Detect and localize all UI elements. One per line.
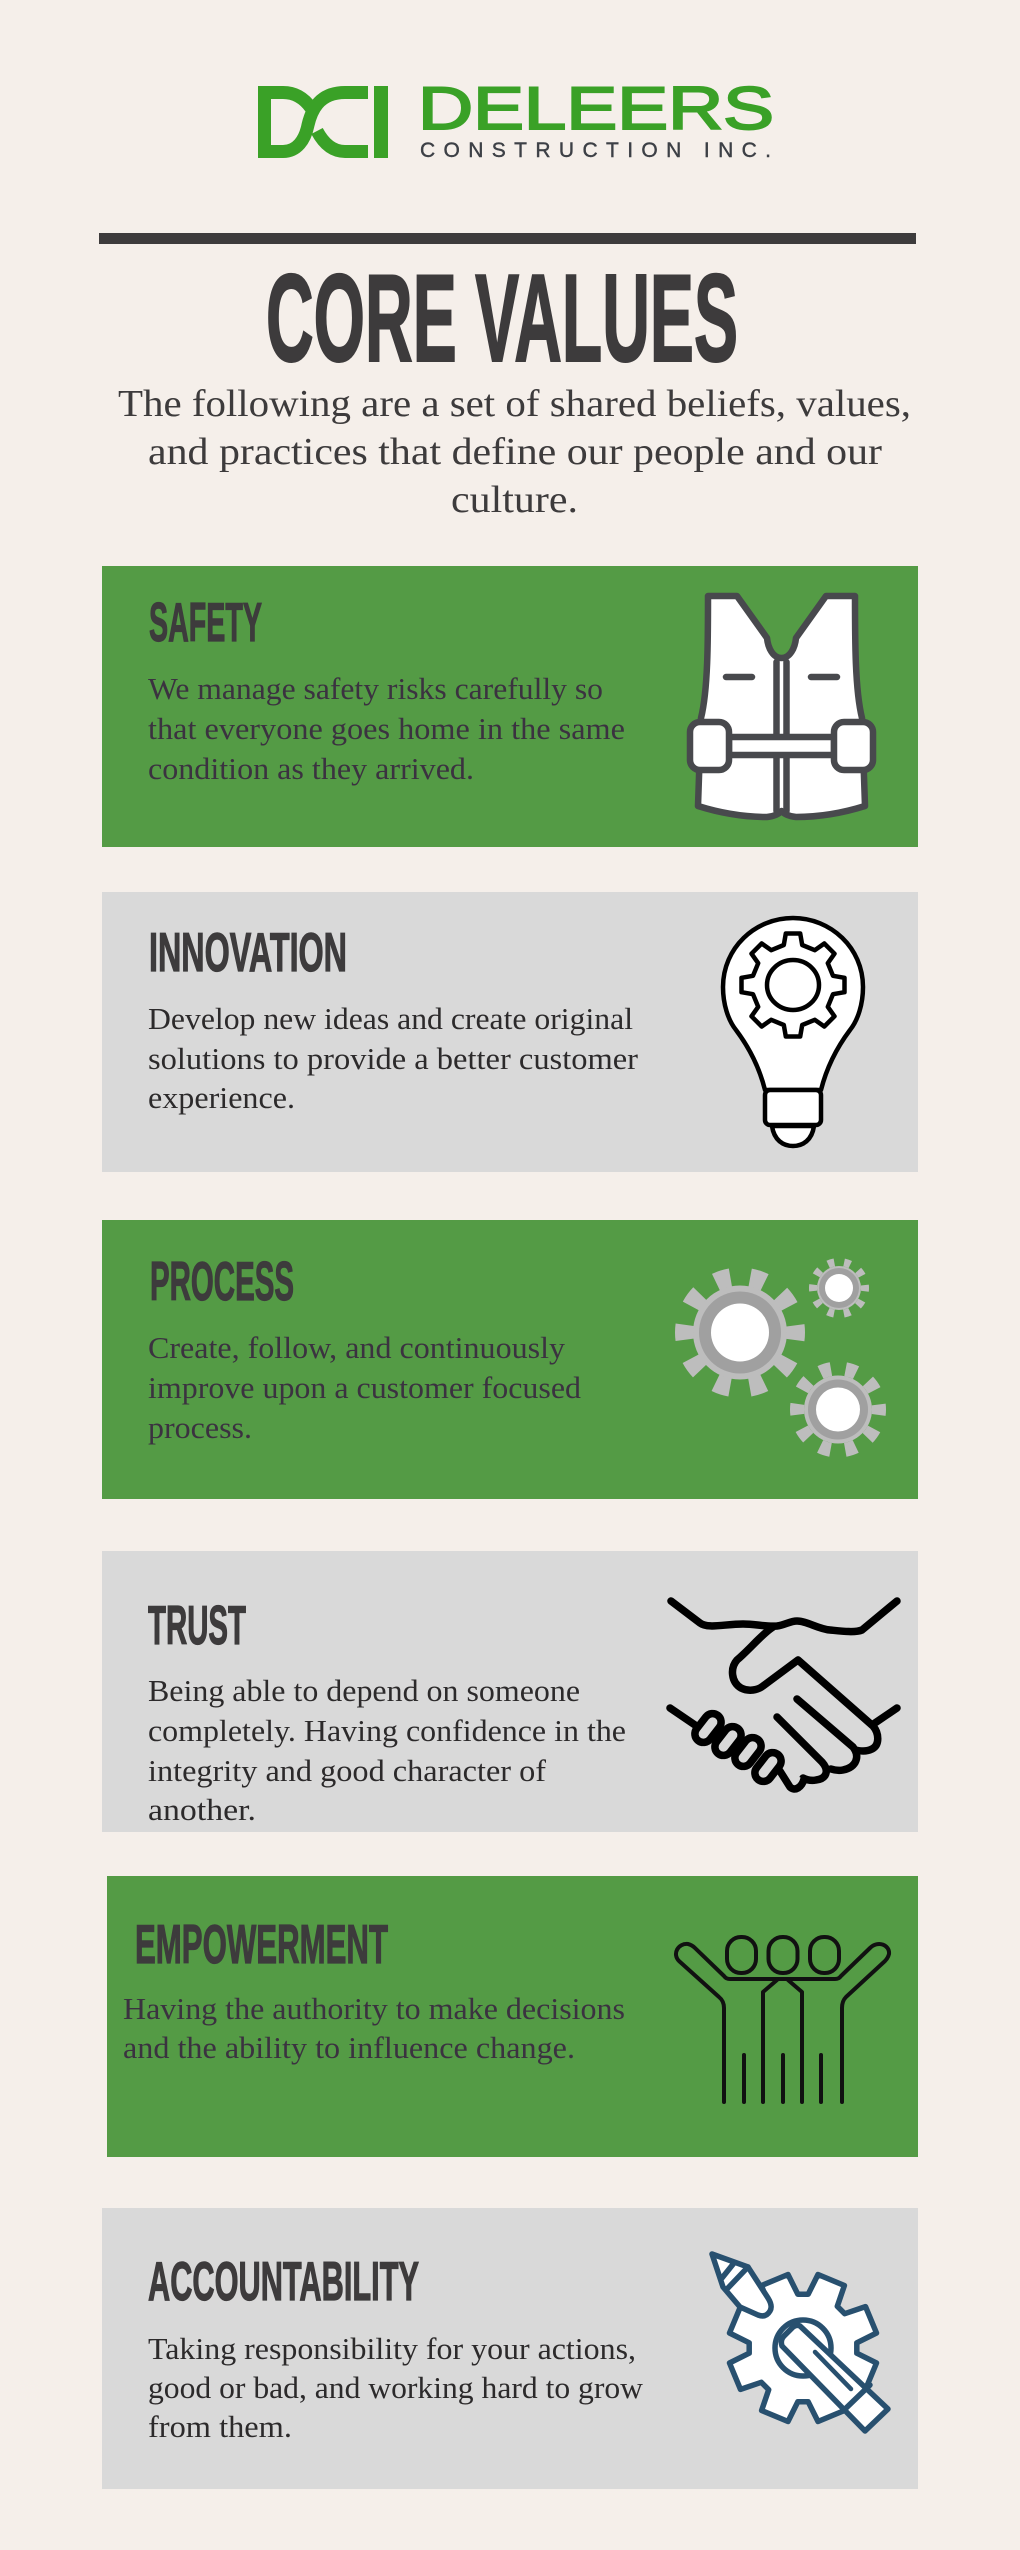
text: safety description: that everyone goes home in the same [148,711,625,746]
heading: process: PROCESS [150,1250,294,1312]
text: process description: Create, follow, and continuously [148,1330,566,1365]
panel: accountability [102,2208,918,2489]
text: trust description: Being able to depend on someone [148,1673,580,1708]
icon: three people [676,1937,889,2102]
icon: handshake [670,1601,897,1789]
panel: safety [102,566,918,847]
icon: gears [685,1262,879,1450]
text: empowerment description [123,1991,625,2065]
heading: innovation: INNOVATION [149,921,347,983]
text: trust description: integrity and good character of [148,1753,547,1788]
text: innovation description [148,1001,639,1115]
text: trust description [148,1673,626,1827]
intro text: culture. [451,479,578,521]
gear: medium [797,1368,879,1450]
text: trust description: completely. Having confidence in the [148,1713,626,1748]
heading: empowerment: EMPOWERMENT [135,1913,388,1975]
text: innovation description: solutions to provide a better customer [148,1041,639,1076]
heading: safety: SAFETY [149,591,262,653]
text: empowerment description: Having the authority to make decisions [123,1991,625,2026]
panel: innovation [102,892,918,1172]
text: process description: improve upon a customer focused [148,1370,582,1405]
logo tagline: CONSTRUCTION INC. [420,139,771,162]
logo: Deleers Construction Inc. [258,75,774,162]
panel: process [102,1220,918,1499]
text: process description: process. [148,1410,252,1445]
text: process description [148,1330,582,1445]
text: empowerment description: and the ability to influence change. [123,2030,575,2065]
heading: accountability: ACCOUNTABILITY [148,2250,419,2312]
text: accountability description: from them. [148,2409,292,2444]
header rule [99,233,916,244]
text: trust description: another. [148,1792,256,1827]
icon: safety vest [690,596,873,817]
text: innovation description: Develop new ideas and create original [148,1001,633,1036]
panel: empowerment [107,1876,918,2157]
text: safety description: We manage safety risks carefully so [148,671,603,706]
logo mark: DCI [258,86,388,158]
logo wordmark: DELEERS [418,75,774,142]
intro text: and practices that define our people and our [148,431,882,473]
text: accountability description [148,2331,644,2444]
text: safety description [148,671,625,786]
intro text: The following are a set of shared beliefs, values, [118,383,911,425]
gear: small [813,1262,865,1314]
gear: large [685,1278,795,1388]
text: accountability description: Taking responsibility for your actions, [148,2331,636,2366]
icon: light bulb with gear [723,918,863,1146]
intro text [118,383,911,521]
text: innovation description: experience. [148,1080,295,1115]
text: accountability description: good or bad, and working hard to grow [148,2370,644,2405]
heading: trust: TRUST [148,1594,246,1656]
panel: trust [102,1551,918,1832]
text: safety description: condition as they arrived. [148,751,474,786]
icon: gear and pencil [712,2254,888,2431]
